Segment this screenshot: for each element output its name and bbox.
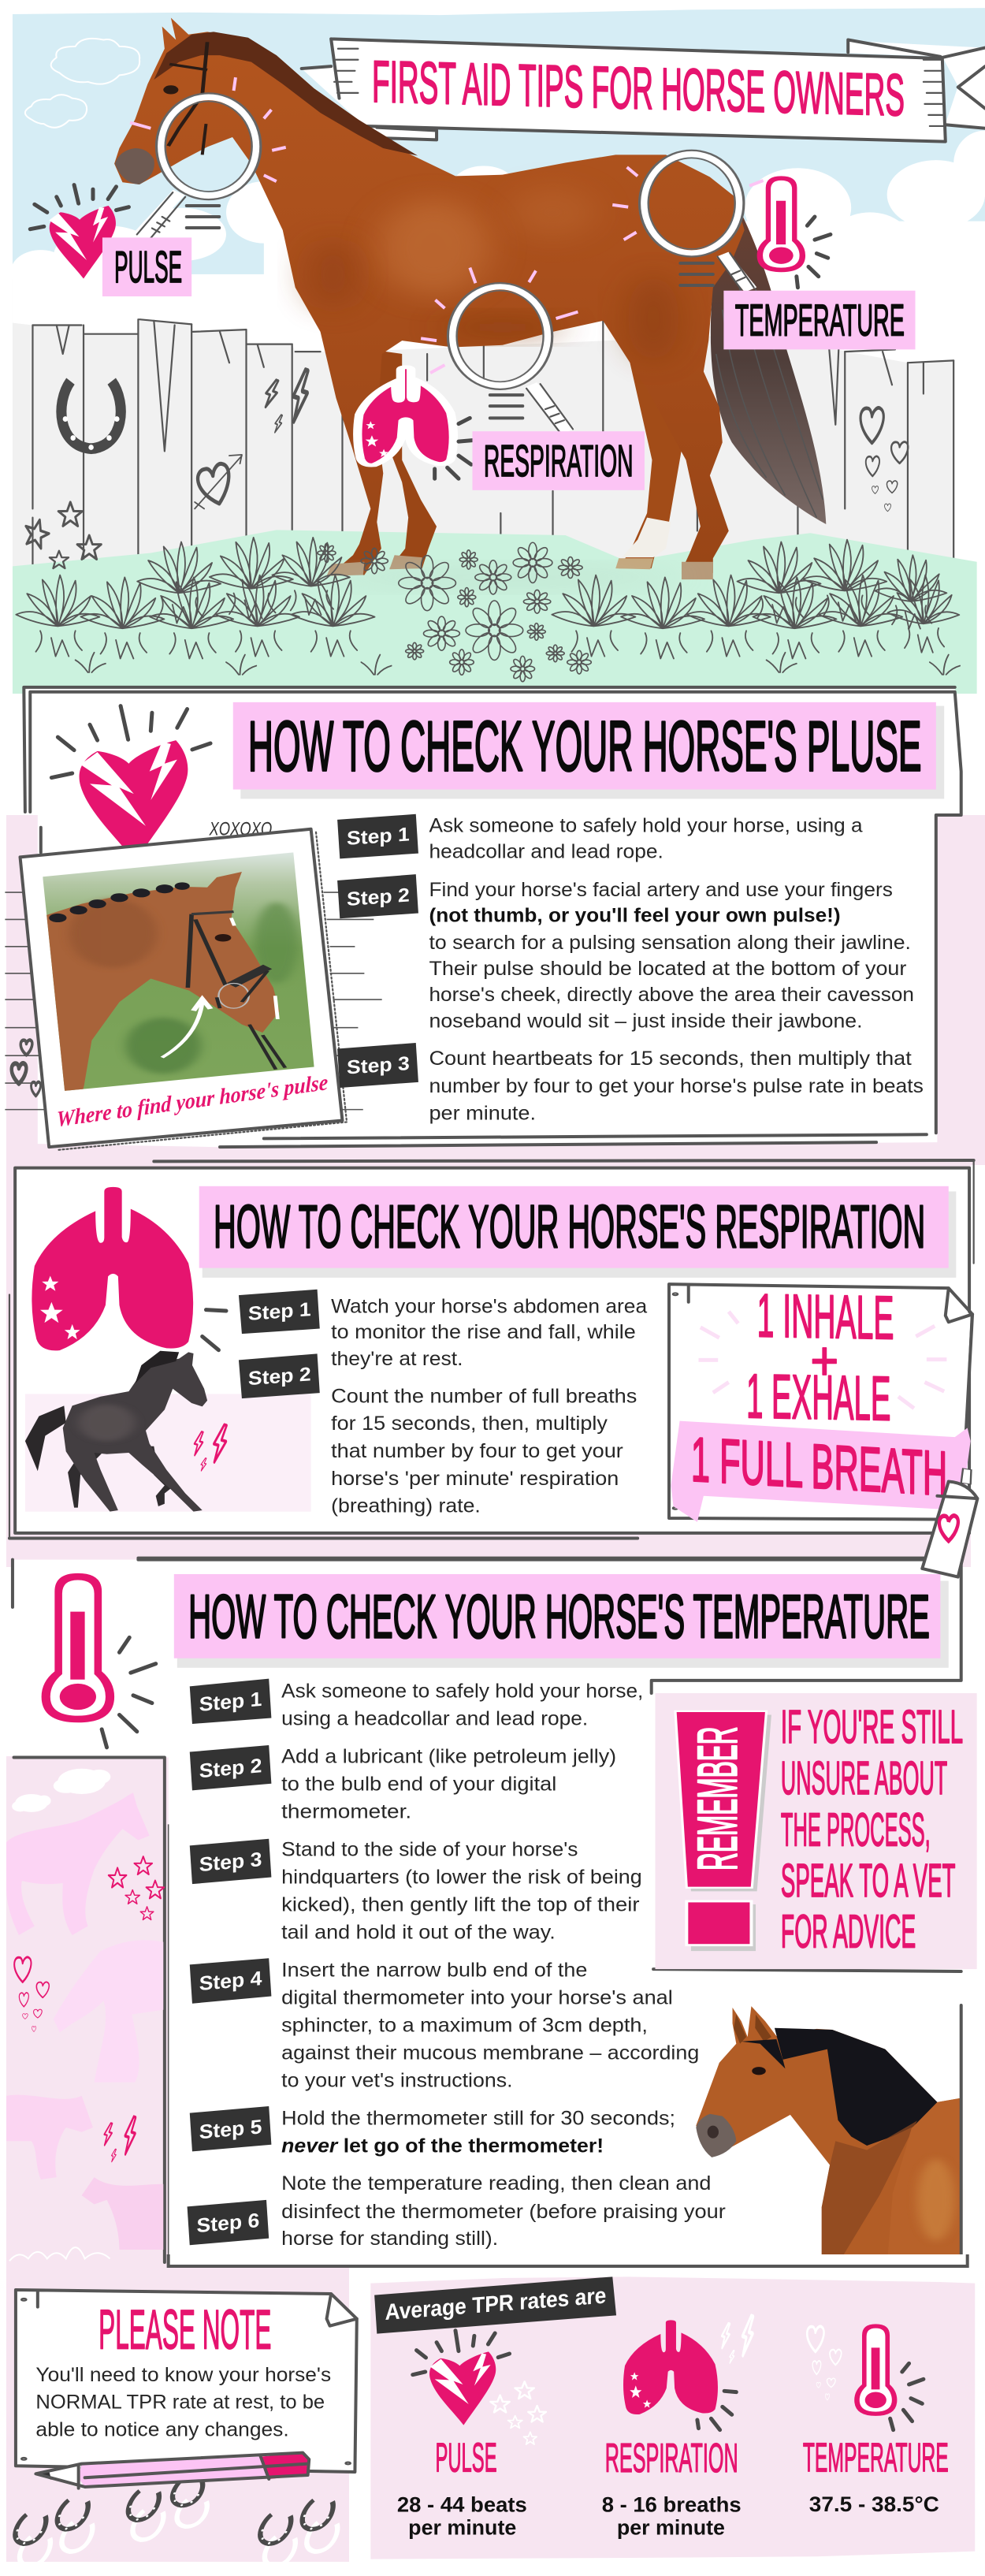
step 2 bbox=[190, 1745, 616, 1822]
panel: how to check respiration: for 15 seconds, then, multiply bbox=[331, 1413, 608, 1435]
bottom section bbox=[10, 2254, 975, 2567]
body shading bbox=[308, 186, 678, 363]
step 4: sphincter, to a maximum of 3cm depth, bbox=[281, 2015, 648, 2036]
step 6: horse for standing still). bbox=[281, 2228, 498, 2250]
note: full breath bbox=[669, 1281, 972, 1522]
far legs bbox=[370, 349, 437, 568]
step 4: Insert the narrow bulb end of the bbox=[281, 1960, 587, 1981]
polaroid photo bbox=[20, 829, 347, 1150]
step 1: using a headcollar and lead rope. bbox=[281, 1708, 588, 1729]
neck shade bbox=[822, 2120, 917, 2258]
stat: respiration bbox=[602, 2320, 742, 2539]
bottom section: per minute bbox=[617, 2516, 725, 2539]
ground shadow bbox=[321, 569, 685, 585]
icon: lungs bbox=[358, 367, 474, 478]
step 3: hindquarters (to lower the risk of being bbox=[281, 1867, 642, 1888]
step 6: disinfect the thermometer (before praising your bbox=[281, 2201, 726, 2223]
pencil bbox=[35, 2453, 309, 2489]
spray can bbox=[922, 1469, 977, 1577]
step 4: against their mucous membrane – according bbox=[281, 2042, 699, 2064]
panel outline bbox=[9, 1160, 974, 1558]
panel: how to check respiration: Count the number of full breaths bbox=[331, 1385, 637, 1407]
note: full breath: + bbox=[810, 1331, 838, 1391]
bottom section: Average TPR rates are bbox=[385, 2283, 606, 2325]
icon: lungs bbox=[32, 1187, 226, 1350]
step 2 bbox=[239, 1353, 637, 1517]
pale horse silhouettes bbox=[6, 1792, 163, 2250]
little clouds bbox=[12, 1769, 110, 1812]
stat: pulse bbox=[397, 2331, 527, 2539]
panel: how to check respiration: that number by four to get your bbox=[331, 1440, 623, 1461]
remember callout: REMEMBER bbox=[686, 1726, 748, 1871]
step 1: headcollar and lead rope. bbox=[429, 841, 663, 862]
fence doodles bbox=[22, 367, 908, 568]
notebook lines bbox=[5, 892, 382, 1110]
tail streaks bbox=[716, 266, 823, 518]
horse body and near legs bbox=[114, 17, 745, 579]
step 6: Step 6 bbox=[197, 2209, 259, 2237]
arrow bbox=[162, 1002, 203, 1058]
panel background bbox=[13, 1560, 968, 2262]
magnifier: respiration bbox=[421, 268, 578, 431]
step 3: per minute. bbox=[429, 1103, 536, 1124]
step 2: Add a lubricant (like petroleum jelly) bbox=[281, 1746, 616, 1767]
hero scene: RESPIRATION bbox=[484, 436, 634, 486]
step 1: they're at rest. bbox=[331, 1348, 463, 1369]
step 2 bbox=[337, 874, 914, 1032]
step 3: Stand to the side of your horse's bbox=[281, 1839, 578, 1860]
socks and hooves bbox=[327, 518, 713, 579]
label: temperature bbox=[723, 291, 916, 349]
step 2: Step 2 bbox=[199, 1755, 262, 1782]
doodle hearts bbox=[12, 1040, 40, 1096]
step 2: to the bulb end of your digital bbox=[281, 1774, 556, 1795]
running horse photo bbox=[25, 1351, 207, 1512]
horseshoes bbox=[10, 2479, 336, 2545]
cloud outlines bbox=[25, 39, 139, 128]
bottom section: You'll need to know your horse's bbox=[35, 2364, 331, 2385]
hero scene: PULSE bbox=[114, 243, 182, 292]
pink doodles bbox=[9, 1856, 164, 2261]
panel: how to check pulse bbox=[5, 687, 961, 1150]
remember callout bbox=[655, 1693, 977, 1969]
doodles: pale white bbox=[490, 2314, 842, 2444]
step 4: to your vet's instructions. bbox=[281, 2070, 513, 2091]
neck and head bbox=[696, 2006, 961, 2258]
step 1 bbox=[190, 1679, 643, 1729]
body, neck, head and near legs bbox=[63, 1352, 207, 1512]
label: respiration bbox=[472, 431, 645, 490]
step 6: Note the temperature reading, then clean and bbox=[281, 2173, 711, 2194]
fence bbox=[13, 318, 955, 588]
panel background bbox=[24, 687, 961, 1147]
step 1: Step 1 bbox=[199, 1688, 262, 1716]
sky bbox=[13, 8, 985, 337]
step 1: Ask someone to safely hold your horse, bbox=[281, 1681, 643, 1702]
step 1: Step 1 bbox=[347, 824, 410, 850]
step 3 bbox=[337, 1043, 924, 1124]
step 2: Step 2 bbox=[347, 884, 410, 910]
panel: how to check respiration bbox=[9, 1160, 974, 1558]
grass bbox=[13, 530, 977, 694]
muzzle bbox=[696, 2114, 736, 2157]
bottom section: 28 - 44 beats bbox=[397, 2493, 527, 2517]
step 5 bbox=[190, 2106, 675, 2157]
photo image bbox=[38, 849, 321, 1096]
panel: how to check temperature bbox=[6, 1560, 977, 2262]
step 2: Step 2 bbox=[248, 1363, 311, 1390]
step 6 bbox=[188, 2173, 726, 2250]
tail bbox=[25, 1405, 66, 1471]
panel outline bbox=[24, 687, 961, 1147]
magnifier: temperature bbox=[612, 151, 764, 290]
bottom section: NORMAL TPR rate at rest, to be bbox=[35, 2391, 325, 2413]
white clouds bbox=[11, 131, 985, 332]
average tpr panel bbox=[370, 2276, 975, 2559]
step 5: Hold the thermometer still for 30 seconds; bbox=[281, 2108, 675, 2129]
label: pulse bbox=[102, 237, 191, 296]
far legs bbox=[68, 1446, 175, 1508]
bottom section: 8 - 16 breaths bbox=[602, 2493, 742, 2517]
step 1: Step 1 bbox=[248, 1298, 311, 1324]
please note card bbox=[16, 2290, 357, 2472]
step 5: Step 5 bbox=[199, 2116, 262, 2143]
main chestnut horse bbox=[114, 17, 826, 579]
step 2: thermometer. bbox=[281, 1801, 411, 1822]
please note card: able to notice any changes. bbox=[35, 2418, 289, 2440]
white shoe shadows bbox=[15, 2500, 341, 2567]
pale panel behind horse bbox=[25, 1394, 311, 1512]
panel: how to check pulse: XOXOXO bbox=[209, 818, 272, 839]
tag: average tpr rates bbox=[374, 2276, 616, 2334]
flower bushes bbox=[16, 538, 960, 682]
mane bbox=[742, 2028, 937, 2146]
step 4 bbox=[190, 1958, 699, 2091]
step 3: Step 3 bbox=[347, 1053, 410, 1078]
tail bbox=[711, 195, 826, 524]
panel outline bbox=[13, 1560, 961, 2262]
heading bbox=[174, 1574, 949, 1668]
step 4: Step 4 bbox=[199, 1967, 262, 1995]
ear shade bbox=[734, 2014, 771, 2044]
icon: heart bbox=[51, 706, 210, 862]
rump bbox=[887, 2098, 961, 2258]
step 2: (breathing) rate. bbox=[331, 1495, 481, 1517]
bottom section: PULSE bbox=[435, 2435, 497, 2481]
step 1 bbox=[239, 1290, 647, 1369]
panel: how to check pulse: Where to find your horse's pulse bbox=[57, 1069, 328, 1132]
mane and head detail bbox=[115, 32, 418, 184]
step 3: Step 3 bbox=[199, 1848, 262, 1876]
hero scene bbox=[11, 8, 985, 694]
step 1 bbox=[337, 814, 863, 862]
title banner bbox=[302, 39, 985, 142]
icon: heart bbox=[30, 185, 128, 279]
bottom section: per minute bbox=[408, 2516, 516, 2539]
pink backdrop behind panels bbox=[6, 815, 985, 2562]
step 3: kicked), then gently lift the top of their bbox=[281, 1894, 640, 1915]
panel: how to check respiration: horse's 'per minute' respiration bbox=[331, 1468, 619, 1489]
bottom right frame bbox=[550, 2005, 961, 2258]
horseshoe bbox=[61, 382, 121, 450]
lightning doodles bbox=[193, 1422, 228, 1472]
stat: temperature bbox=[803, 2324, 949, 2516]
step 3 bbox=[190, 1839, 642, 1943]
icon: thermometer bbox=[757, 176, 831, 288]
step 3: tail and hold it out of the way. bbox=[281, 1922, 556, 1943]
icon: thermometer bbox=[42, 1573, 156, 1748]
step 5: never let go of the thermometer! bbox=[281, 2135, 604, 2157]
panel background bbox=[14, 1167, 971, 1533]
step 4: digital thermometer into your horse's anal bbox=[281, 1987, 673, 2008]
bay horse photo bbox=[696, 2006, 961, 2258]
magnifier: pulse bbox=[130, 77, 286, 238]
temperature panel bottom edge bbox=[169, 2254, 968, 2266]
